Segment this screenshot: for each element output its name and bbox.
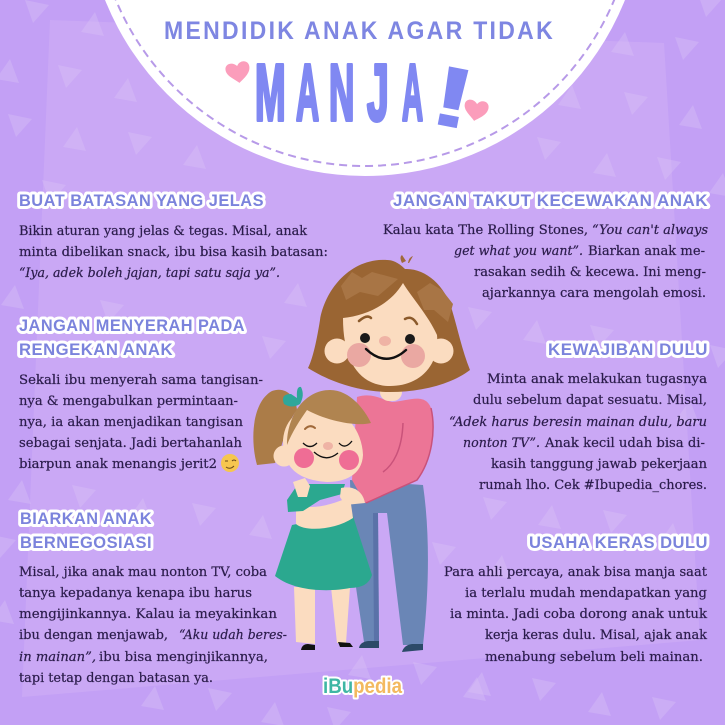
section: Jangan menyerah pada rengekan anak: sebagai senjata. Jadi bertahanlah xyxy=(19,436,243,451)
title line 1: MENDIDIK ANAK AGAR TIDAK xyxy=(164,17,555,45)
section: Usaha keras dulu: menabung sebelum beli mainan. xyxy=(485,650,703,665)
title word MANJA: N xyxy=(329,49,354,138)
section: Jangan menyerah pada rengekan anak: RENGEKAN ANAK xyxy=(19,340,173,359)
section: Biarkan anak bernegosiasi: Misal, jika anak mau nonton TV, coba xyxy=(19,565,267,580)
daughter xyxy=(253,387,372,650)
section: Jangan takut kecewakan anak: Biarkan anak me- xyxy=(588,244,705,259)
section: Buat batasan yang jelas: minta dibelikan snack, ibu bisa kasih batasan: xyxy=(19,245,328,260)
icon: heart left xyxy=(225,60,251,85)
exclamation mark: ! xyxy=(421,46,485,149)
section: Buat batasan yang jelas: Bikin aturan yang jelas & tegas. Misal, anak xyxy=(19,224,307,239)
section: Jangan takut kecewakan anak: JANGAN TAKUT KECEWAKAN ANAK xyxy=(393,191,708,210)
section: Biarkan anak bernegosiasi: in mainan”, xyxy=(19,650,96,665)
section: Usaha keras dulu: kerja keras dulu. Misal, ajak anak xyxy=(485,628,707,643)
section: Biarkan anak bernegosiasi: BIARKAN ANAK xyxy=(20,509,152,528)
section: Kewajiban dulu: “Adek harus beresin mainan dulu, baru xyxy=(449,415,707,430)
section: Usaha keras dulu: ia terlalu mudah mendapatkan yang xyxy=(465,586,707,601)
section: Buat batasan yang jelas xyxy=(19,191,328,281)
icon: winking face emoji xyxy=(221,454,239,472)
title word MANJA xyxy=(255,47,423,138)
section: Kewajiban dulu: Minta anak melakukan tugasnya xyxy=(487,372,707,387)
section: Kewajiban dulu: kasih tanggung jawab pekerjaan xyxy=(491,457,708,472)
title word MANJA: M xyxy=(255,49,286,138)
section: Kewajiban dulu: KEWAJIBAN DULU xyxy=(548,340,708,359)
section: Jangan takut kecewakan anak: rasakan sedih & kecewa. Ini meng- xyxy=(474,265,706,280)
section: Usaha keras dulu xyxy=(444,533,708,665)
section: Kewajiban dulu: dulu sebelum dapat sesuatu. Misal, xyxy=(473,393,707,408)
section: Buat batasan yang jelas: BUAT BATASAN YANG JELAS xyxy=(19,191,264,210)
section: Biarkan anak bernegosiasi: tapi tetap dengan batasan ya. xyxy=(19,671,213,686)
section: Jangan takut kecewakan anak: get what you want”. xyxy=(454,244,583,259)
section: Biarkan anak bernegosiasi: ibu bisa menginjikannya, xyxy=(99,650,268,665)
section: Usaha keras dulu: Para ahli percaya, anak bisa manja saat xyxy=(444,565,708,580)
section: Jangan menyerah pada rengekan anak: JANGAN MENYERAH PADA xyxy=(19,316,245,335)
mother xyxy=(308,255,470,652)
icon: heart right xyxy=(462,98,490,123)
section: Jangan takut kecewakan anak: Kalau kata The Rolling Stones, xyxy=(383,223,588,238)
section: Kewajiban dulu: Anak kecil udah bisa di- xyxy=(544,436,705,451)
section: Buat batasan yang jelas: “Iya, adek boleh jajan, tapi satu saja ya”. xyxy=(19,266,280,281)
section: Jangan menyerah pada rengekan anak: biarpun anak menangis jerit2 xyxy=(19,457,217,472)
section: Biarkan anak bernegosiasi: tanya kepadanya kenapa ibu harus xyxy=(19,586,252,601)
section: Kewajiban dulu xyxy=(449,340,708,493)
section: Biarkan anak bernegosiasi: mengijinkannya. Kalau ia meyakinkan xyxy=(19,607,278,622)
illustration: mother and daughter xyxy=(253,255,470,652)
header white semicircle xyxy=(85,0,645,176)
section: Jangan takut kecewakan anak: “You can't always xyxy=(592,223,708,238)
section: Biarkan anak bernegosiasi xyxy=(19,509,287,686)
title word MANJA: A xyxy=(296,48,319,137)
section: Jangan menyerah pada rengekan anak: nya & mengabulkan permintaan- xyxy=(19,394,238,409)
section: Usaha keras dulu: ia minta. Jadi coba dorong anak untuk xyxy=(450,607,707,622)
section: Kewajiban dulu: rumah lho. Cek #Ibupedia_chores. xyxy=(479,478,707,493)
section: Biarkan anak bernegosiasi: “Aku udah beres- xyxy=(179,628,287,643)
section: Jangan takut kecewakan anak: ajarkannya cara mengolah emosi. xyxy=(482,286,706,301)
section: Jangan menyerah pada rengekan anak xyxy=(19,316,263,472)
section: Jangan menyerah pada rengekan anak: Sekali ibu menyerah sama tangisan- xyxy=(19,373,263,388)
section: Biarkan anak bernegosiasi: ibu dengan menjawab, xyxy=(19,628,168,643)
section: Jangan takut kecewakan anak xyxy=(383,191,708,301)
title xyxy=(164,17,555,149)
section: Jangan menyerah pada rengekan anak: nya, ia akan menjadikan tangisan xyxy=(19,415,244,430)
title word MANJA: J xyxy=(367,49,389,138)
logo: iBupedia: iBupedia xyxy=(323,675,402,698)
section: Usaha keras dulu: USAHA KERAS DULU xyxy=(529,533,708,552)
section: Biarkan anak bernegosiasi: BERNEGOSIASI xyxy=(20,533,152,552)
title word MANJA: A xyxy=(402,47,423,137)
section: Kewajiban dulu: nonton TV”. xyxy=(463,436,540,451)
